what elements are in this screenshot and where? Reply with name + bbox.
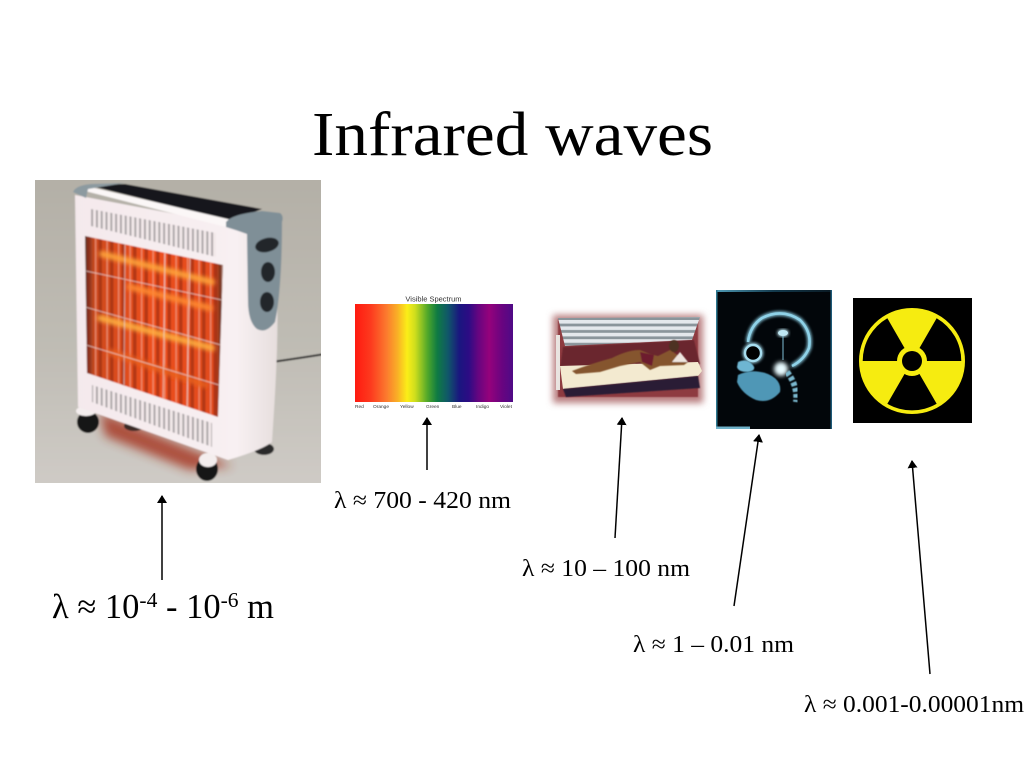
arrow: radiation (912, 461, 930, 674)
label: infrared wavelength: - 10 (157, 588, 221, 626)
image: visible spectrum (355, 294, 513, 410)
floor shadow (100, 412, 232, 470)
control knob 1 (261, 262, 275, 282)
spine (787, 372, 796, 402)
yellow trefoil disc (859, 308, 965, 414)
title: Infrared waves (312, 101, 713, 169)
spectrum heading: Visible Spectrum (405, 294, 462, 304)
spectrum colour labels: Blue (452, 404, 462, 410)
arrow: spectrum (426, 418, 428, 470)
spectrum colour labels: Violet (500, 404, 513, 410)
top white trim (85, 187, 232, 227)
control display (254, 237, 280, 253)
label: gamma wavelength: λ ≈ 0.001-0.00001nm (804, 692, 1024, 718)
bed interior shadow (560, 340, 700, 368)
image: x-ray skull (716, 290, 832, 429)
label: infrared wavelength: λ ≈ 10 (52, 588, 139, 626)
heating element grille (85, 230, 225, 420)
rear top panel (87, 184, 262, 221)
casters (77, 411, 99, 433)
glowing bands (100, 254, 212, 385)
label: infrared wavelength: -4 (139, 588, 158, 612)
upper lip (737, 360, 754, 372)
label: infrared wavelength: -6 (221, 588, 239, 612)
jaw (737, 371, 780, 401)
heater body (75, 195, 277, 460)
spectrum colour labels: Green (426, 404, 440, 410)
spectrum gradient (355, 304, 513, 402)
grey control panel (226, 211, 283, 330)
arrow: x-ray (734, 435, 759, 606)
top vents (91, 209, 216, 257)
eye socket (745, 345, 761, 361)
image: tanning bed (553, 315, 703, 403)
label: ultraviolet wavelength: λ ≈ 10 – 100 nm (522, 556, 690, 582)
brain (778, 330, 788, 336)
bright joint (774, 362, 788, 376)
label: infrared wavelength: m (239, 588, 274, 626)
label: visible wavelength: λ ≈ 700 - 420 nm (334, 488, 511, 514)
image: radiation symbol (853, 298, 972, 423)
image: infrared heater (30, 175, 326, 488)
bed surface (560, 362, 702, 389)
power cord (272, 354, 325, 362)
arrow: heater (161, 496, 163, 580)
spectrum colour labels: Red (355, 404, 364, 410)
label: x-ray wavelength: λ ≈ 1 – 0.01 nm (633, 632, 794, 658)
arrow: tanning bed (615, 418, 622, 538)
control knob 2 (260, 292, 274, 312)
spectrum colour labels: Indigo (476, 404, 489, 410)
bottom vents (92, 385, 212, 447)
spectrum colour labels: Yellow (400, 404, 414, 410)
tanning lamps canopy (558, 317, 700, 346)
grey end cap left (73, 183, 125, 198)
spectrum colour labels: Orange (373, 404, 389, 410)
spectrum colour labels (355, 404, 513, 410)
person lying (572, 340, 688, 374)
skull outline (748, 313, 810, 366)
grille wires (85, 240, 222, 408)
left bed post (556, 335, 560, 390)
